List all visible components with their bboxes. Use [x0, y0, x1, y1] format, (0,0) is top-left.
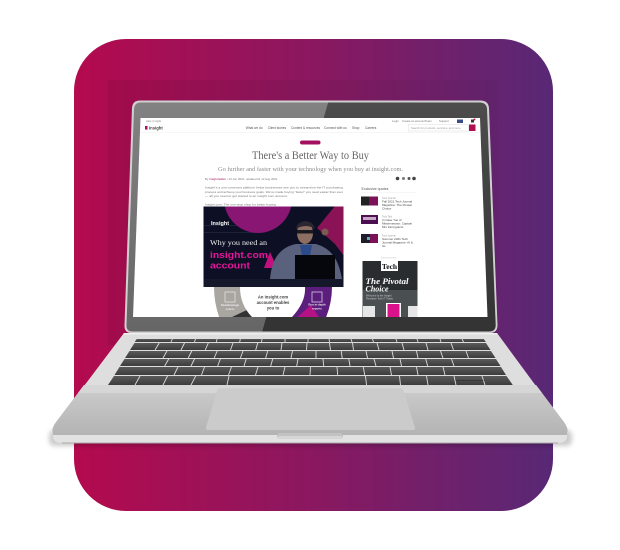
article banner image: insight.com	[210, 250, 268, 261]
site header: Login	[392, 119, 399, 123]
sidebar item 1: Magazine: The Pivotal	[382, 203, 412, 207]
front notch	[277, 433, 343, 439]
article banner image: Insight	[211, 221, 229, 227]
sidebar item 2: Misdemeanor: Captain	[382, 222, 413, 226]
benefits wheel graphic: Read/manage	[221, 303, 240, 307]
site header: Content & resources	[291, 126, 320, 130]
sidebar magazine ad: Choice	[366, 284, 389, 294]
benefits wheel graphic	[214, 287, 332, 317]
site header: Team	[425, 119, 433, 123]
site header: Connect with us	[324, 126, 347, 130]
site header	[140, 118, 480, 133]
sidebar item 1: Fall 2021 Tech Journal	[382, 200, 412, 204]
man at laptop	[270, 221, 342, 280]
laptop shadow	[49, 430, 572, 446]
sidebar magazine ad: Research Tech IT Today	[366, 298, 394, 300]
sidebar item 3: Us	[382, 244, 386, 248]
sidebar list	[361, 187, 416, 260]
sidebar item 3: Summer 2021 Tech	[382, 237, 408, 241]
sidebar magazine ad: Tech	[382, 262, 398, 271]
sidebar magazine ad	[362, 261, 418, 317]
palm rest	[52, 385, 568, 436]
sidebar list: Advertisement	[381, 256, 397, 260]
benefits wheel graphic: reports	[312, 306, 322, 310]
site header: Shop	[352, 126, 360, 130]
laptop base	[52, 333, 568, 444]
sidebar magazine ad: The Pivotal	[366, 277, 409, 286]
laptop screen lid	[124, 100, 497, 333]
sidebar item 2: In Case You of	[382, 218, 402, 222]
keyboard	[108, 339, 513, 385]
sidebar item 1: Tech Journal	[382, 197, 396, 200]
site header: Search for products, services, and more	[411, 126, 461, 130]
gradient background panel	[74, 39, 553, 511]
front edge	[53, 435, 567, 443]
site header: Insight	[149, 126, 163, 130]
benefits wheel graphic: orders	[226, 307, 235, 311]
sidebar item 2: Tech Talk	[382, 216, 393, 218]
article banner image: Why you need an	[210, 239, 267, 247]
sidebar item 1	[361, 196, 412, 210]
sidebar item 1: Choice	[382, 206, 392, 210]
sidebar item 2	[361, 215, 413, 229]
benefits wheel graphic: An insight.com	[258, 294, 288, 300]
article intro text: process and achieve your business goals. We've made buying "faster" you need easier than ever	[205, 190, 343, 194]
category pill	[300, 140, 320, 144]
arrow key split	[456, 380, 484, 382]
site header: Careers	[365, 126, 377, 130]
article intro text	[205, 186, 343, 206]
web page on screen	[130, 117, 490, 322]
article intro text: Insight.com: The one-stop shop for better buying	[205, 202, 276, 206]
article banner image: account	[210, 260, 251, 272]
byline	[205, 177, 416, 181]
sidebar item 3: Tech Journal	[382, 234, 396, 238]
article subtitle: Go further and faster with your technology when you buy at insight.com.	[218, 166, 403, 173]
site header: What we do	[246, 126, 263, 130]
site header: Client stories	[268, 126, 287, 130]
sidebar item 2: Mrs Fancypants	[382, 225, 404, 229]
site header: Support	[439, 119, 449, 123]
top deck	[84, 333, 536, 386]
key gaps	[135, 339, 485, 385]
article intro text: Insight's a one-covenant platform helps businesses see you to streamline the IT purchasing	[205, 186, 343, 190]
benefits wheel graphic: account enables	[257, 300, 290, 305]
article title: There's a Better Way to Buy	[252, 150, 369, 162]
laptop	[49, 100, 572, 446]
article banner image	[204, 206, 344, 287]
article intro text: — all you need to get started is an insight.com account.	[205, 194, 288, 198]
site header: Help | Insight	[146, 119, 161, 123]
benefits wheel graphic: you to	[267, 306, 280, 310]
benefits wheel graphic: Run in-depth	[308, 302, 326, 306]
sidebar magazine ad: Welcome to the Insight	[366, 294, 392, 298]
sidebar item 3: Journal Magazine: AI &	[382, 240, 413, 244]
sidebar list: Exclusive quotes	[362, 187, 389, 191]
sidebar item 3	[361, 234, 413, 248]
byline: By Insight Editor / 10 Jun 2021, updated 01 12 Aug 2021	[205, 177, 278, 181]
key rows	[108, 339, 513, 385]
site header: Create an account	[402, 119, 425, 123]
trackpad	[206, 388, 415, 430]
